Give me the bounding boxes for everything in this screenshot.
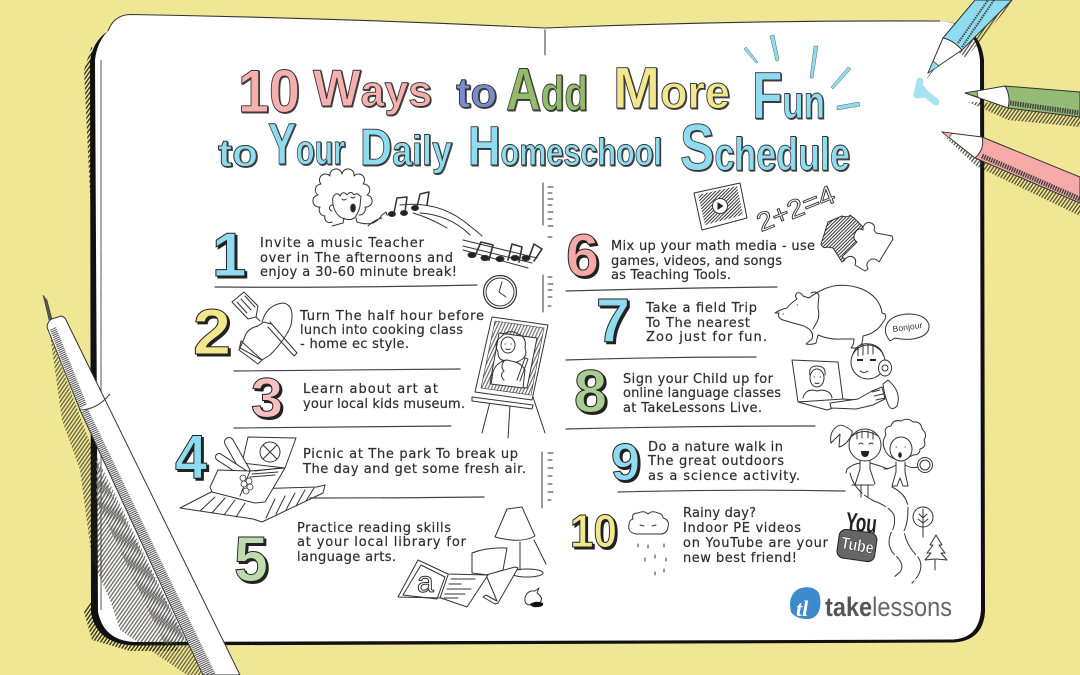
title line 2: Daily [360,119,453,177]
text 5: Practice reading skills [297,521,451,536]
text 10: new best friend! [683,551,797,566]
text 4: The day and get some fresh air. [302,462,526,477]
number 9: 9 [611,434,640,492]
item 2 [193,292,484,368]
TakeLessons logo: tl [796,596,809,621]
item 9 [611,419,947,583]
icon: YouTube logo: You [844,506,878,539]
icon: kids on trail [831,419,932,583]
title line 1 [238,56,825,132]
title line 2: Your [268,112,345,177]
icon: hippo [775,285,886,348]
text 3: Learn about art at [303,382,438,397]
title line 1: More [613,56,730,121]
text 8 [623,372,781,416]
item 8 [574,314,929,425]
icon: video player [694,183,747,230]
number 2: 2 [193,296,231,368]
number 10: 10 [570,505,617,557]
title line 2 [218,110,850,184]
number 6: 6 [566,222,599,289]
item 5 [234,507,546,607]
text 1: Invite a music Teacher [260,236,425,251]
text 2: - home ec style. [300,337,409,352]
gutter stitching [542,30,553,508]
icon: YouTube logo: Tube [840,533,875,558]
icon: rain cloud [629,512,668,575]
text 10: Rainy day? [683,506,756,521]
text 6: Mix up your math media - use [611,239,815,254]
pen [43,295,240,675]
text 6: games, videos, and songs [611,254,782,269]
item 4 [175,423,526,522]
text 10 [683,506,829,566]
text 9 [647,440,800,484]
title [218,56,850,184]
icon: books and lamp: a [417,566,434,599]
text 5: at your local library for [297,535,467,550]
number 8: 8 [574,358,607,425]
text 9: The great outdoors [647,454,784,469]
blue pencil [917,0,1014,102]
logo mark [790,587,820,619]
title line 1: Ways [313,60,432,118]
text 8: Sign your Child up for [623,372,774,387]
TakeLessons logo [790,587,952,622]
title line 2: Homeschool [468,114,662,177]
text 2 [299,309,484,352]
icon: wall clock [484,276,516,308]
text 9: as a science activity. [648,469,800,484]
icon: round tree [913,507,933,537]
text 9: Do a nature walk in [648,440,783,455]
item 10 [570,505,878,575]
text 4 [302,447,526,477]
icon: jigsaw puzzle [821,215,893,271]
item 1 [212,169,542,290]
item 6 [566,179,893,289]
item 7 [596,285,886,356]
text 2: Turn The half hour before [299,309,484,324]
icon: speech bubble: Bonjour [892,320,923,334]
text 6 [611,239,815,283]
notebook [84,14,985,651]
text 7: Zoo just for fun. [646,330,767,345]
title line 1: Add [506,56,588,123]
text 3 [303,382,465,412]
icon: pine tree [925,535,947,570]
number 1: 1 [212,221,246,290]
icon: books and lamp [398,507,546,607]
text 1 [260,236,457,280]
icon: singer [313,169,390,226]
icon: picnic basket on blanket [180,437,325,522]
item 3 [251,366,465,429]
text 8: online language classes [623,386,781,401]
icon: YouTube logo [836,506,878,562]
title line 1: Fun [752,58,825,132]
title line 2: to [218,133,258,175]
text 1: over in The afternoons and [260,251,453,266]
text 6: as Teaching Tools. [611,268,731,283]
title line 1: to [456,69,497,116]
title line 2: Schedule [680,110,850,184]
icon: girl at laptop [792,344,898,410]
number 5: 5 [234,523,268,595]
pink pencil [942,132,1080,216]
text 1: enjoy a 30-60 minute break! [260,265,457,280]
icon: speech bubble [885,314,929,341]
text 2: lunch into cooking class [300,323,463,338]
text 4: Picnic at The park To break up [303,447,518,462]
title line 1: 10 [238,58,300,125]
number 3: 3 [251,366,283,429]
text 7: To The nearest [645,316,750,331]
text 10: Indoor PE videos [683,521,801,536]
text 5 [297,521,467,565]
icon: music notes [388,192,542,268]
icon: portrait on easel [472,317,548,438]
text 7 [645,301,767,345]
logo wordmark: takelessons [825,592,952,622]
green pencil [965,86,1080,127]
icon: spatula and oven mitt [232,292,297,364]
sunburst rays [744,35,860,110]
text 3: your local kids museum. [303,397,465,412]
number 4: 4 [175,423,207,492]
text 7: Take a field Trip [645,301,757,316]
text 5: language arts. [297,550,396,565]
text 10: on YouTube are your [683,536,829,551]
icon: equation: 2+2=4 [752,179,839,238]
number 7: 7 [596,287,630,356]
text 8: at TakeLessons Live. [623,401,762,416]
